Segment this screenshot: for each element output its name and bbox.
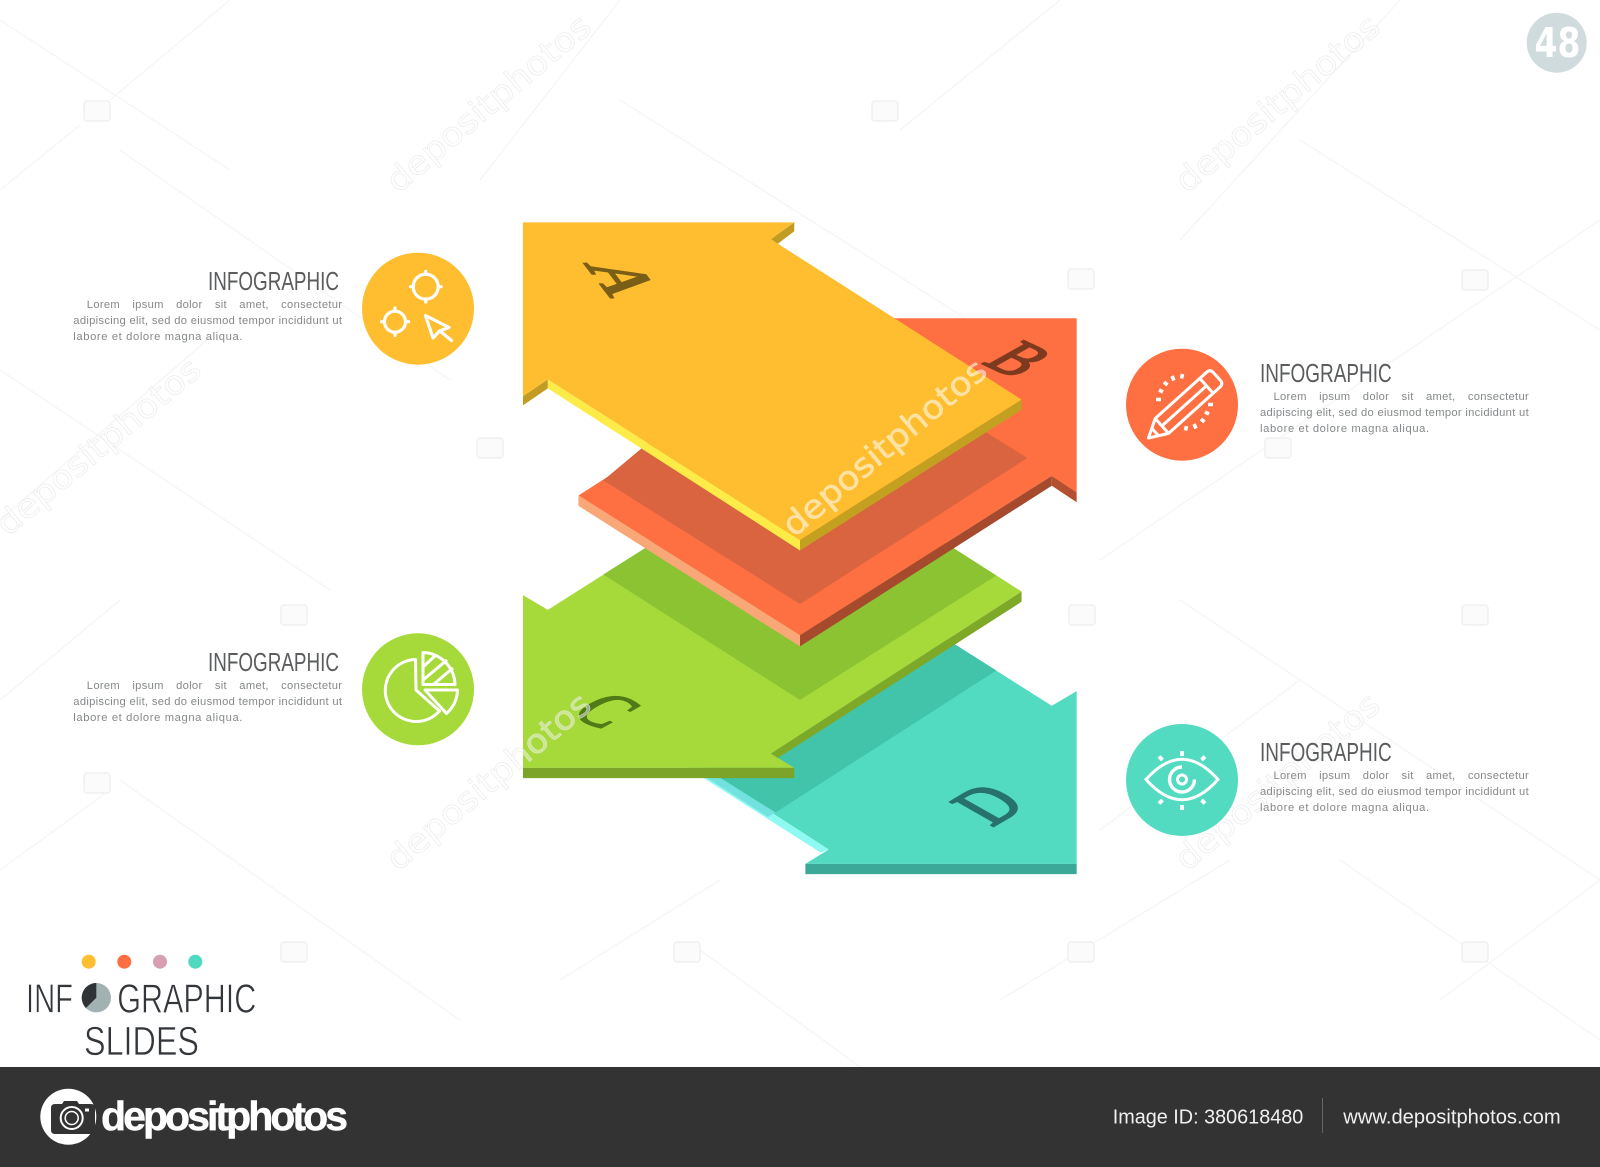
text block B (1260, 360, 1529, 435)
text block C: labore et dolore magna aliqua. (73, 712, 243, 724)
logo: infographic slides (26, 955, 256, 1064)
text block C: Lorem ipsum dolor sit amet, consectetur (87, 680, 342, 692)
logo: infographic slides: GRAPHIC (117, 976, 256, 1022)
icon circle: pie chart (362, 633, 474, 745)
logo: infographic slides: SLIDES (84, 1018, 199, 1064)
letter B: B (967, 332, 1070, 386)
footer website: www.depositphotos.com (1342, 1106, 1561, 1128)
text block C: INFOGRAPHIC (208, 649, 339, 677)
text block B: Lorem ipsum dolor sit amet, consectetur (1274, 391, 1529, 403)
text block A: INFOGRAPHIC (208, 268, 339, 296)
footer camera logo (40, 1089, 96, 1145)
footer image id: Image ID: 380618480 (1113, 1106, 1303, 1128)
watermarks (0, 6, 1387, 878)
text block D: labore et dolore magna aliqua. (1260, 802, 1430, 814)
arrow D (578, 546, 1077, 874)
text block B: INFOGRAPHIC (1260, 360, 1392, 388)
icon circle: pencil (1126, 349, 1238, 461)
logo: infographic slides: INF (26, 976, 73, 1022)
letter A: A (568, 259, 678, 299)
watermarks: depositphotos (1167, 684, 1387, 878)
arrow B (578, 316, 1077, 646)
text block D: adipiscing elit, sed do eiusmod tempor incididunt ut (1260, 786, 1529, 798)
watermarks: depositphotos (1167, 6, 1387, 200)
logo pie mark (82, 983, 111, 1012)
text block D: Lorem ipsum dolor sit amet, consectetur (1274, 770, 1529, 782)
letter C: C (555, 683, 658, 737)
letter D: D (933, 772, 1042, 835)
numbered badge (1527, 13, 1587, 73)
watermark camera icons (84, 101, 1488, 962)
text block A: labore et dolore magna aliqua. (73, 331, 243, 343)
text block B: adipiscing elit, sed do eiusmod tempor incididunt ut (1260, 407, 1529, 419)
text block D: INFOGRAPHIC (1260, 739, 1392, 767)
arrow C (523, 450, 1022, 778)
logo dots (82, 955, 202, 969)
text block C (73, 649, 342, 724)
numbered badge: 48 (1534, 19, 1580, 67)
watermarks: depositphotos (378, 6, 598, 200)
text block A: Lorem ipsum dolor sit amet, consectetur (87, 299, 342, 311)
text block A: adipiscing elit, sed do eiusmod tempor incididunt ut (73, 315, 342, 327)
text block B: labore et dolore magna aliqua. (1260, 423, 1430, 435)
watermarks: depositphotos (774, 350, 994, 544)
text block C: adipiscing elit, sed do eiusmod tempor incididunt ut (73, 696, 342, 708)
text block A (73, 268, 342, 343)
arrow A (523, 222, 1022, 550)
icon circle: eye (1126, 724, 1238, 836)
footer bar (0, 1067, 1600, 1167)
watermarks: depositphotos (378, 684, 598, 878)
footer brand name: depositphotos (101, 1093, 348, 1139)
icon circle: targets and cursor (362, 253, 474, 365)
text block D (1260, 739, 1529, 814)
